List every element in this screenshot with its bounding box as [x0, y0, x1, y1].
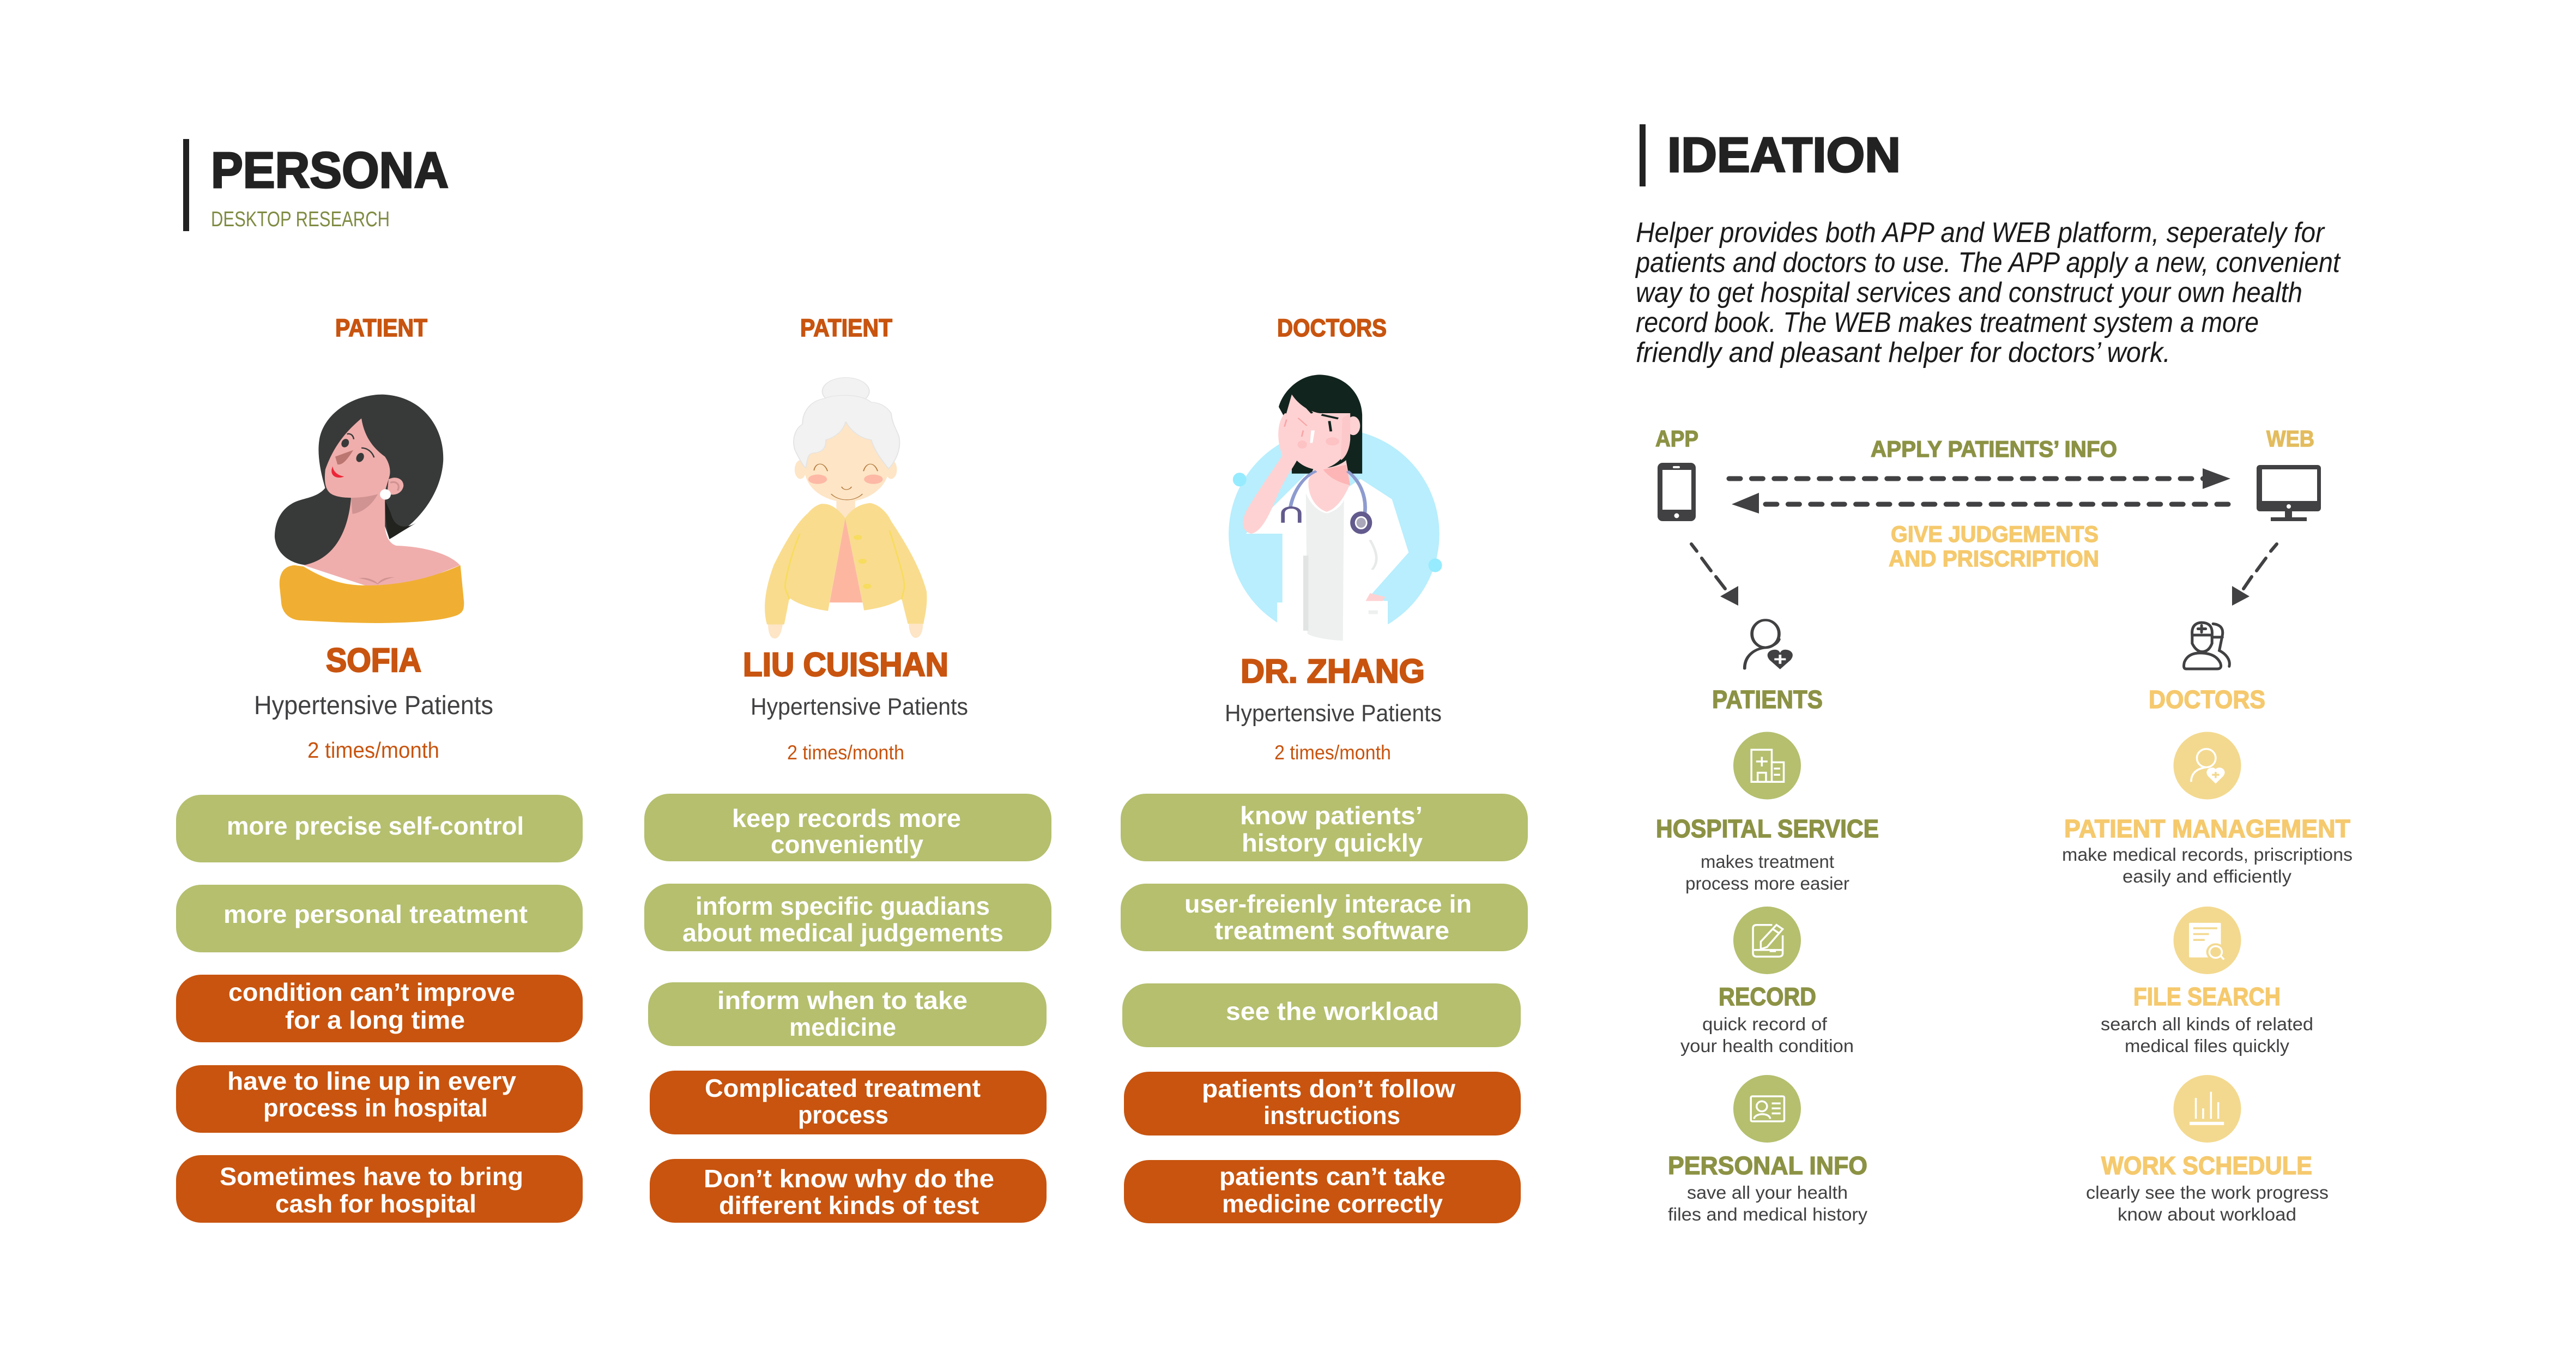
icon: patient with heart — [1745, 620, 1793, 669]
pain point pill: have to line up in every — [227, 1067, 516, 1095]
feature: work schedule: clearly see the work progress — [2086, 1182, 2329, 1203]
persona type: Hypertensive Patients — [751, 693, 968, 720]
icon: hospital — [1733, 732, 1801, 799]
illustration: Sofia — [275, 395, 464, 623]
persona column: Sofia — [176, 314, 583, 1223]
visit frequency: 2 times/month — [1274, 741, 1391, 764]
icon: notebook and pencil — [1733, 907, 1801, 974]
label: web: WEB — [2266, 426, 2314, 451]
feature: personal info: files and medical history — [1668, 1204, 1868, 1224]
goal pill: inform when to take — [717, 986, 967, 1014]
persona name: DR. ZHANG — [1241, 653, 1425, 690]
role label: PATIENT — [335, 314, 427, 342]
feature: work schedule: know about workload — [2118, 1204, 2296, 1224]
feature: hospital service: HOSPITAL SERVICE — [1656, 814, 1879, 843]
pain point pill: for a long time — [285, 1006, 465, 1034]
goal pill — [176, 795, 583, 862]
feature: patient management — [2062, 732, 2353, 886]
icon: phone — [1658, 463, 1696, 521]
goal pill — [176, 885, 583, 952]
goal pill — [1121, 794, 1528, 861]
persona heading — [183, 139, 449, 231]
pain point pill — [650, 1159, 1047, 1223]
feature: patient management: easily and efficiently — [2123, 866, 2292, 886]
goal pill — [1121, 884, 1528, 951]
persona heading: DESKTOP RESEARCH — [211, 208, 390, 231]
feature: file search: medical files quickly — [2125, 1036, 2290, 1056]
goal pill: history quickly — [1242, 829, 1423, 857]
intro paragraph: friendly and pleasant helper for doctors’ work. — [1636, 337, 2170, 369]
goal pill — [648, 982, 1047, 1046]
persona type: Hypertensive Patients — [254, 691, 493, 720]
feature: hospital service — [1656, 732, 1879, 893]
pain point pill: patients can’t take — [1219, 1162, 1446, 1191]
feature: work schedule: WORK SCHEDULE — [2101, 1151, 2312, 1180]
feature: record: quick record of — [1702, 1014, 1828, 1034]
feature: record: your health condition — [1680, 1036, 1854, 1056]
icon: document search — [2174, 907, 2241, 974]
intro paragraph: patients and doctors to use. The APP apply a new, convenient — [1635, 247, 2341, 279]
feature: record: RECORD — [1719, 982, 1816, 1011]
goal pill: inform specific guadians — [696, 892, 990, 920]
persona name: LIU CUISHAN — [743, 646, 948, 683]
icon: doctor — [2184, 623, 2229, 669]
goal pill — [644, 794, 1051, 861]
pain point pill — [1124, 1160, 1521, 1223]
pain point pill — [176, 975, 583, 1042]
goal pill: know patients’ — [1240, 801, 1423, 830]
persona name: SOFIA — [326, 642, 421, 679]
persona heading: PERSONA — [211, 142, 449, 198]
pain point pill: cash for hospital — [275, 1189, 476, 1218]
pain point pill: process in hospital — [263, 1094, 488, 1122]
pain point pill: Sometimes have to bring — [220, 1162, 523, 1191]
heading: patients: PATIENTS — [1712, 685, 1823, 714]
column: patients features — [1656, 620, 1879, 1224]
feature: hospital service: process more easier — [1685, 873, 1849, 893]
goal pill: keep records more — [732, 804, 961, 832]
visit frequency: 2 times/month — [307, 738, 439, 763]
pain point pill: different kinds of test — [719, 1191, 979, 1219]
feature: record — [1680, 907, 1854, 1056]
heading: doctors: DOCTORS — [2149, 685, 2265, 714]
pain point pill: instructions — [1263, 1101, 1400, 1129]
icon: patient with heart — [2174, 732, 2241, 799]
icon: id card — [1733, 1075, 1801, 1143]
icon: monitor — [2257, 465, 2321, 521]
goal pill: about medical judgements — [682, 919, 1003, 947]
persona column: Liu Cuishan — [644, 314, 1051, 1223]
visit frequency: 2 times/month — [787, 741, 904, 764]
intro paragraph: Helper provides both APP and WEB platform, seperately for — [1636, 217, 2325, 249]
goal pill: more personal treatment — [223, 900, 528, 928]
pain point pill — [650, 1071, 1047, 1134]
goal pill: more precise self-control — [227, 812, 524, 840]
panel: ideation — [1635, 124, 2353, 1224]
pain point pill: Don’t know why do the — [704, 1164, 994, 1193]
flow diagram: app and web — [1655, 426, 2321, 606]
intro paragraph: way to get hospital services and construct your own health — [1636, 277, 2302, 309]
goal pill: conveniently — [771, 830, 923, 859]
feature: file search: search all kinds of related — [2101, 1014, 2313, 1034]
feature: personal info: PERSONAL INFO — [1668, 1151, 1867, 1180]
persona column: Dr. Zhang — [1121, 314, 1528, 1223]
feature: patient management: make medical records, priscriptions — [2062, 844, 2353, 865]
label: app: APP — [1655, 426, 1698, 451]
label: give judgements and priscription — [1889, 521, 2099, 571]
panel: persona — [176, 139, 1528, 1223]
goal pill: see the workload — [1226, 997, 1439, 1025]
feature: patient management: PATIENT MANAGEMENT — [2064, 814, 2350, 843]
illustration: Dr. Zhang — [1229, 375, 1442, 645]
label: apply patients' info: APPLY PATIENTS’ INFO — [1871, 436, 2117, 462]
persona type: Hypertensive Patients — [1225, 700, 1442, 727]
pain point pill: condition can’t improve — [228, 978, 515, 1006]
pain point pill — [176, 1065, 583, 1133]
feature: personal info: save all your health — [1687, 1182, 1848, 1203]
intro paragraph: record book. The WEB makes treatment system a more — [1636, 307, 2259, 339]
intro paragraph — [1635, 217, 2341, 369]
illustration: Liu Cuishan — [765, 378, 927, 638]
feature: file search — [2101, 907, 2313, 1056]
pain point pill — [176, 1155, 583, 1223]
feature: hospital service: makes treatment — [1701, 851, 1834, 872]
goal pill: user-freienly interace in — [1184, 890, 1472, 918]
ideation heading: IDEATION — [1667, 128, 1901, 183]
pain point pill: patients don’t follow — [1202, 1074, 1455, 1103]
arrow: app to web — [1729, 468, 2230, 489]
pain point pill: process — [798, 1101, 888, 1129]
goal pill — [644, 884, 1051, 951]
pain point pill — [1124, 1072, 1521, 1135]
column: doctors features — [2062, 623, 2353, 1224]
feature: work schedule — [2086, 1075, 2329, 1224]
goal pill: treatment software — [1214, 916, 1449, 945]
label: give judgements and priscription: AND PRISCRIPTION — [1889, 546, 2099, 571]
arrow: app to patients — [1691, 544, 1738, 606]
arrow: web to doctors — [2232, 544, 2277, 606]
pain point pill: medicine correctly — [1222, 1189, 1443, 1218]
pain point pill: Complicated treatment — [705, 1074, 981, 1102]
feature: personal info — [1668, 1075, 1868, 1224]
label: give judgements and priscription: GIVE JUDGEMENTS — [1891, 521, 2099, 547]
arrow: web to app — [1732, 493, 2228, 514]
goal pill: medicine — [789, 1013, 896, 1041]
role label: PATIENT — [800, 314, 892, 342]
icon: bar chart — [2174, 1075, 2241, 1143]
goal pill — [1122, 983, 1521, 1047]
role label: DOCTORS — [1277, 314, 1387, 342]
feature: file search: FILE SEARCH — [2133, 982, 2281, 1011]
